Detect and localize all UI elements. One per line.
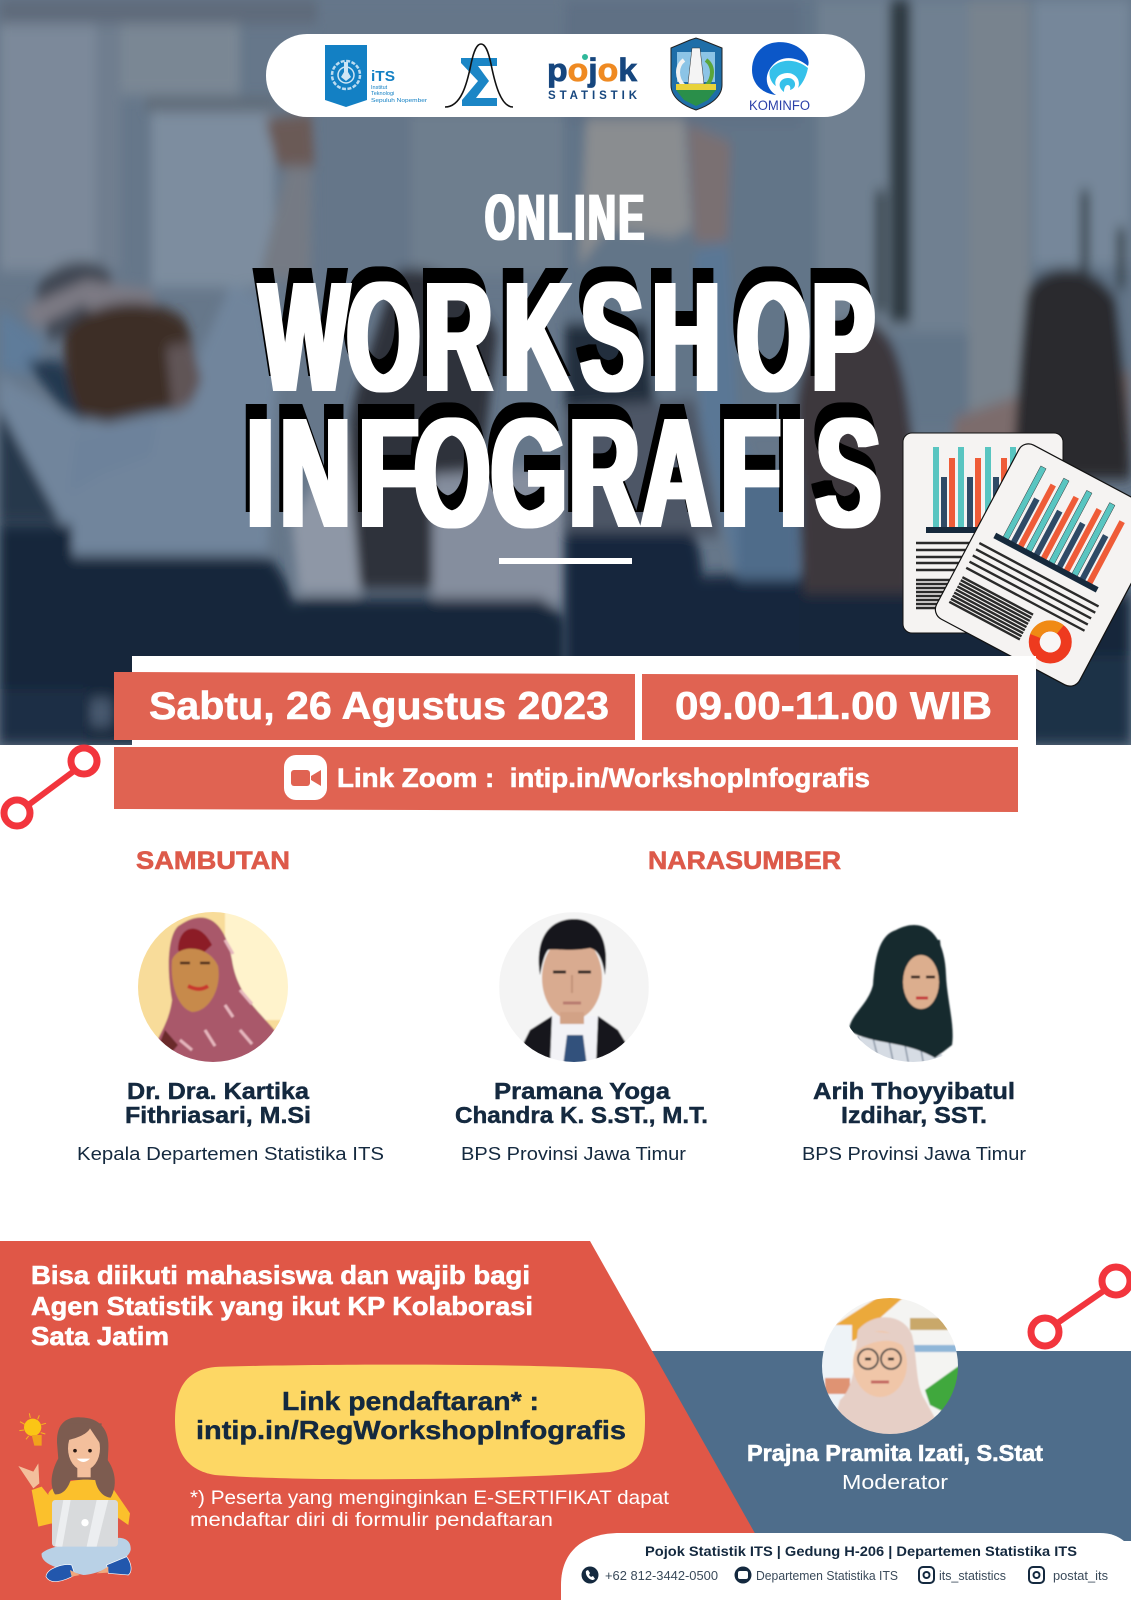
logo: ITS: iTS <box>371 68 395 85</box>
role: BPS Provinsi Jawa Timur <box>461 1143 686 1164</box>
speaker: Arih: Izdihar, SST. <box>841 1102 987 1128</box>
name: Prajna Pramita Izati, S.Stat <box>747 1440 1043 1466</box>
illustration: chart documents <box>903 433 1131 690</box>
logo bar <box>266 34 865 117</box>
back document <box>903 433 1063 633</box>
name: Dr. Dra. Kartika <box>127 1078 310 1104</box>
date box: Sabtu, 26 Agustus 2023 <box>149 685 609 728</box>
speaker: Kartika <box>77 910 384 1164</box>
icon: red nodes left <box>4 748 97 826</box>
logo: ITS: Teknologi <box>371 91 394 97</box>
registration note: Agen Statistik yang ikut KP Kolaborasi <box>31 1291 533 1321</box>
title: workshop infografis: WORKSHOP <box>260 250 875 425</box>
title: workshop infografis: INFOGRAFIS <box>247 385 881 561</box>
logo: sigma bell curve <box>445 44 513 107</box>
icon: zoom camera <box>284 755 327 800</box>
icon: red nodes right <box>1031 1267 1130 1346</box>
contact: phone <box>582 1566 718 1584</box>
registration note: Bisa diikuti mahasiswa dan wajib bagi <box>31 1260 530 1290</box>
background classroom photo <box>0 0 1131 745</box>
certificate note: *) Peserta yang menginginkan E-SERTIFIKAT dapat <box>190 1487 670 1509</box>
role: Kepala Departemen Statistika ITS <box>77 1143 384 1164</box>
logo: East Java coat of arms <box>671 38 722 110</box>
contact: instagram postat_its: postat_its <box>1053 1569 1108 1583</box>
title: workshop infografis: INFOGRAFIS <box>243 370 877 546</box>
logo: ITS: Sepuluh Nopember <box>371 98 427 104</box>
portrait <box>135 910 291 1066</box>
info panel <box>0 656 1131 855</box>
speaker: Pramana: Chandra K. S.ST., M.T. <box>455 1102 708 1128</box>
donut chart <box>1034 626 1066 658</box>
footer <box>561 1533 1131 1600</box>
registration link callout: Link pendaftaran* : <box>282 1386 539 1416</box>
portrait <box>820 1296 960 1436</box>
name: Pramana Yoga <box>494 1078 671 1104</box>
speaker: Pramana <box>455 912 708 1164</box>
registration note: Sata Jatim <box>31 1321 169 1351</box>
zoom link bar: Link Zoom : intip.in/WorkshopInfografis <box>337 763 870 793</box>
speaker: Kartika: Fithriasari, M.Si <box>125 1102 311 1128</box>
date box <box>114 672 635 740</box>
logo: ITS: Institut <box>371 85 388 91</box>
panel: registration <box>0 1241 770 1600</box>
illustration: woman with laptop <box>18 1413 131 1582</box>
logo: Kominfo <box>749 42 810 113</box>
contact: instagram its_statistics: its_statistics <box>939 1569 1006 1583</box>
moderator <box>747 1296 1043 1494</box>
portrait <box>849 925 953 1066</box>
heading: online: ONLINE <box>485 181 647 255</box>
registration link callout <box>175 1365 645 1479</box>
speaker: Arih <box>802 925 1026 1164</box>
panel: moderator background <box>640 1351 1131 1541</box>
zoom link bar <box>114 747 1018 812</box>
role: Moderator <box>842 1471 948 1494</box>
time box: 09.00-11.00 WIB <box>675 685 992 728</box>
logo: pojok statistik: pojok <box>547 52 637 88</box>
heading: narasumber: NARASUMBER <box>648 847 841 875</box>
logo: Kominfo: KOMINFO <box>749 98 810 113</box>
certificate note: mendaftar diri di formulir pendaftaran <box>190 1509 553 1531</box>
contact: instagram its_statistics <box>919 1567 1006 1583</box>
footer: Pojok Statistik ITS | Gedung H-206 | Departemen Statistika ITS <box>645 1543 1077 1559</box>
role: BPS Provinsi Jawa Timur <box>802 1143 1026 1164</box>
portrait <box>499 912 649 1066</box>
title: workshop infografis: WORKSHOP <box>256 235 871 410</box>
contact: youtube: Departemen Statistika ITS <box>756 1569 898 1583</box>
contact: phone: +62 812-3442-0500 <box>605 1569 718 1583</box>
heading: sambutan: SAMBUTAN <box>136 847 290 875</box>
front document <box>932 440 1131 690</box>
logo: ITS <box>325 45 427 107</box>
registration note <box>31 1260 533 1351</box>
registration link callout: intip.in/RegWorkshopInfografis <box>196 1415 626 1445</box>
logo: pojok statistik: STATISTIK <box>548 90 638 102</box>
name: Arih Thoyyibatul <box>813 1078 1015 1104</box>
contact: instagram postat_its <box>1029 1567 1108 1583</box>
title: workshop infografis <box>243 235 881 564</box>
time box <box>642 674 1018 740</box>
certificate note <box>190 1487 670 1531</box>
